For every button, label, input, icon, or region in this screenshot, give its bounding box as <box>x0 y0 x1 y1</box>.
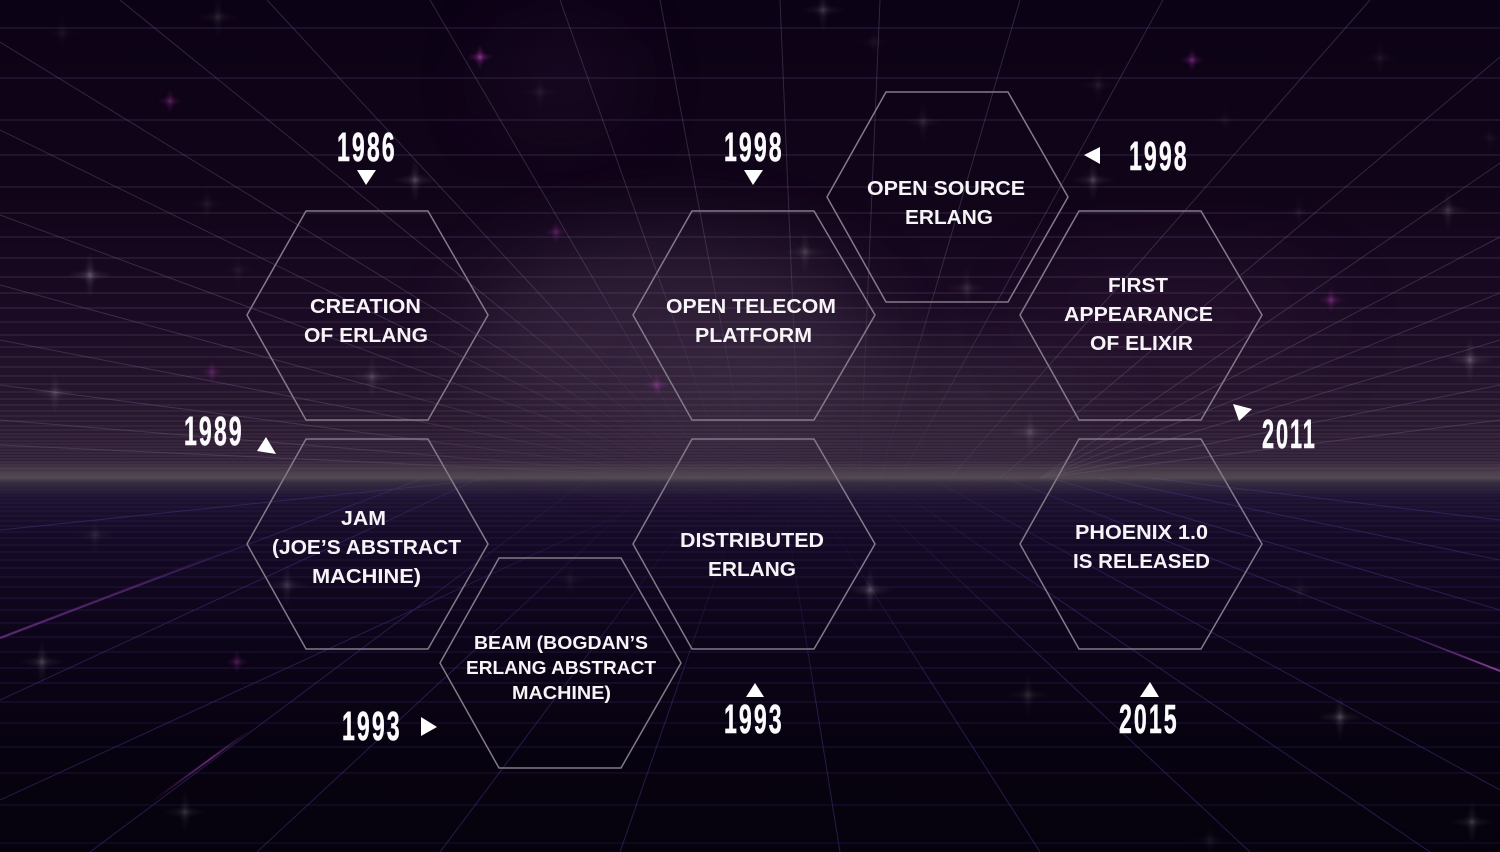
year marker: 1989 <box>184 409 276 455</box>
label: creation of Erlang <box>304 295 428 347</box>
year marker: 2011: 2011 <box>1262 411 1317 457</box>
year marker: 1993 distributed: 1993 <box>724 697 784 743</box>
label: open telecom platform <box>666 295 836 347</box>
label: distributed Erlang: DISTRIBUTED <box>680 529 824 552</box>
label: first appearance of Elixir <box>1064 274 1213 355</box>
label: first appearance of Elixir: APPEARANCE <box>1064 303 1213 326</box>
year marker: 1998 open source: 1998 <box>1129 134 1189 180</box>
year marker: 2011 <box>1233 404 1317 457</box>
label: Phoenix 1.0: IS RELEASED <box>1073 550 1210 573</box>
year marker: 1989: 1989 <box>184 409 244 455</box>
purple light streaks <box>0 550 1500 803</box>
perspective grid horizontals, lower <box>0 490 1500 843</box>
label: BEAM: MACHINE) <box>512 682 611 703</box>
perspective grid radial lines, upper <box>0 0 1500 478</box>
hexagon: JAM <box>247 439 488 649</box>
label: creation of Erlang: CREATION <box>310 295 421 318</box>
label: first appearance of Elixir: OF ELIXIR <box>1090 332 1193 355</box>
label: JAM <box>272 507 461 588</box>
label: open source Erlang: ERLANG <box>905 206 993 229</box>
hexagon: distributed Erlang <box>633 439 875 649</box>
label: distributed Erlang: ERLANG <box>708 558 796 581</box>
hexagon: first appearance of Elixir <box>1020 211 1262 420</box>
label: JAM: (JOE’S ABSTRACT <box>272 536 461 559</box>
label: creation of Erlang: OF ERLANG <box>304 324 428 347</box>
horizon glow band <box>0 460 1500 496</box>
label: Phoenix 1.0: PHOENIX 1.0 <box>1075 521 1208 544</box>
year marker: 2015: 2015 <box>1119 697 1179 743</box>
year marker: 1993 BEAM: 1993 <box>342 704 402 750</box>
perspective grid radial lines, lower <box>0 478 1500 852</box>
label: open telecom platform: PLATFORM <box>695 324 812 347</box>
year marker: 1998 open source <box>1084 134 1189 180</box>
perspective grid horizontals, upper <box>0 28 1500 468</box>
hexagon: open source Erlang <box>827 92 1068 302</box>
label: BEAM <box>466 632 657 703</box>
label: BEAM: BEAM (BOGDAN’S <box>474 632 648 653</box>
label: JAM: JAM <box>341 507 386 530</box>
label: first appearance of Elixir: FIRST <box>1108 274 1168 297</box>
label: JAM: MACHINE) <box>312 565 421 588</box>
year marker: 1986: 1986 <box>337 125 397 171</box>
label: Phoenix 1.0 <box>1073 521 1210 573</box>
label: open telecom platform: OPEN TELECOM <box>666 295 836 318</box>
label: BEAM: ERLANG ABSTRACT <box>466 657 657 678</box>
hexagon: Phoenix 1.0 <box>1020 439 1262 649</box>
label: open source Erlang <box>867 177 1025 229</box>
year marker: 1993 BEAM <box>342 704 437 750</box>
hexagon: creation of Erlang <box>247 211 488 420</box>
year marker: 1998 open telecom: 1998 <box>724 125 784 171</box>
hexagon: open telecom platform <box>633 211 875 420</box>
label: open source Erlang: OPEN SOURCE <box>867 177 1025 200</box>
hexagon: BEAM <box>440 558 681 768</box>
label: distributed Erlang <box>680 529 824 581</box>
